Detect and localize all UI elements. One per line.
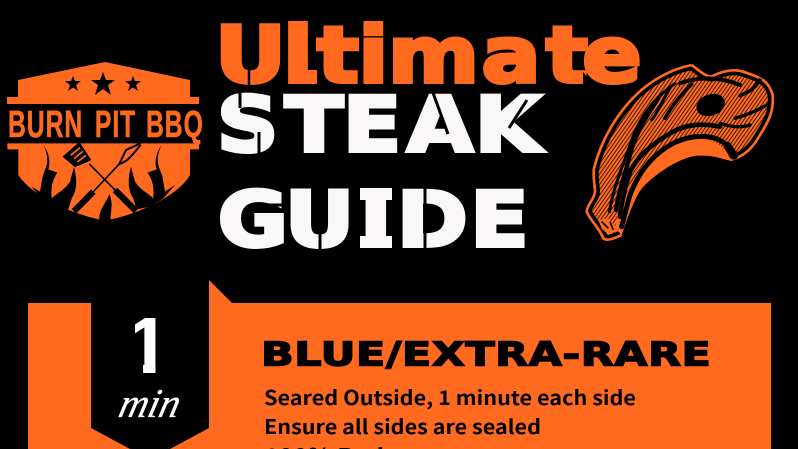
bone end — [598, 218, 618, 235]
panel description: Ensure all sides are sealed — [264, 411, 541, 440]
panel background — [28, 280, 771, 449]
slab and stencil details — [360, 188, 392, 248]
crossed spatula and fork — [63, 143, 141, 211]
title: Ultimate: Ultimate — [215, 9, 642, 101]
logo brand name: BURN — [8, 103, 91, 145]
logo shield top — [7, 62, 199, 104]
icon: steak illustration — [587, 65, 773, 240]
ribbon masks trimming the numeral — [118, 310, 175, 376]
logo shield bottom with flames and tools — [7, 143, 199, 221]
title: GUIDE: GUIDE — [218, 176, 529, 265]
fat crescent fill — [615, 139, 732, 235]
minutes unit: min — [115, 382, 186, 427]
panel description: Seared Outside, 1 minute each side — [264, 382, 636, 411]
logo brand name: PIT — [95, 103, 144, 145]
title: STEAK: STEAK — [217, 81, 543, 170]
slab and stencil details — [300, 70, 317, 84]
logo: Burn Pit BBQ shield — [7, 62, 204, 221]
dark centre of the eye — [693, 90, 728, 120]
panel: blue / extra-rare — [28, 280, 771, 449]
time ribbon — [91, 303, 209, 449]
panel heading: BLUE/EXTRA-RARE — [261, 335, 711, 374]
logo brand name: BBQ — [146, 103, 204, 145]
muscle veins — [609, 79, 767, 227]
logo stars — [65, 72, 141, 95]
flames — [32, 145, 175, 221]
panel description — [264, 382, 636, 449]
minutes number: 1 — [126, 301, 170, 390]
steak body with outline — [587, 65, 773, 240]
steak outer line — [587, 65, 773, 240]
